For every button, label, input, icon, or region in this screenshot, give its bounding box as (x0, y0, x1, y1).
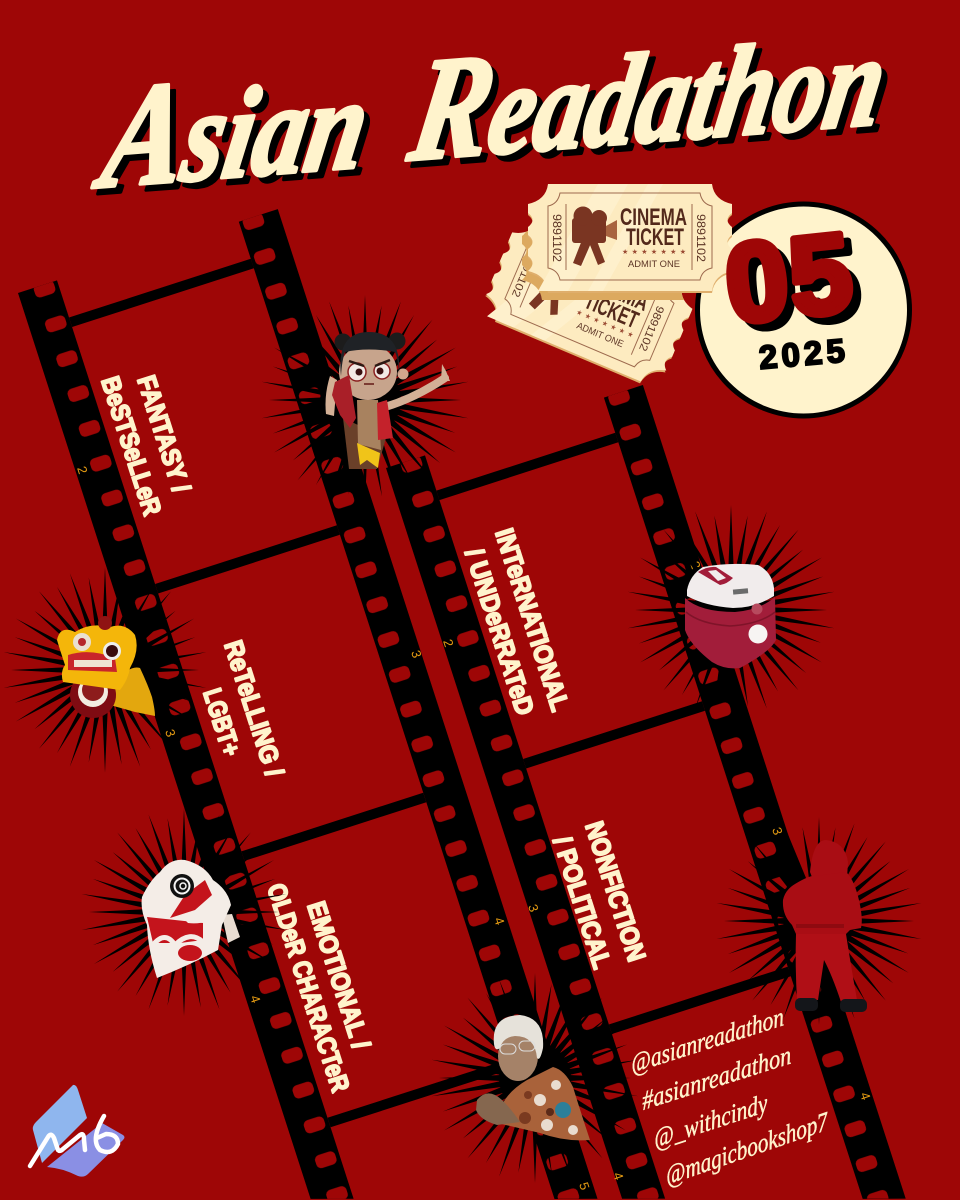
category: nonfiction / political (547, 818, 652, 972)
category: fantasy / bestseller: FANTASY / (131, 372, 197, 496)
category: retelling / lgbt+ (197, 637, 290, 780)
date: month number: 05 (719, 209, 858, 347)
illustration: white lion dance (142, 860, 240, 978)
category: fantasy / bestseller: BeSTSeLLeR (95, 373, 168, 519)
starburst: hoodie figure (716, 817, 922, 1025)
starburst: grandmother (431, 973, 639, 1183)
illustration: grandmother (476, 1015, 590, 1140)
category: fantasy / bestseller (95, 372, 197, 519)
social handles (630, 1002, 831, 1191)
title (86, 0, 905, 227)
category: retelling / lgbt+: ReTeLLING / (218, 637, 290, 780)
illustration: young warrior child (326, 332, 450, 469)
illustration: rice cooker (685, 564, 776, 668)
film frame numbers: 2 (687, 559, 704, 571)
social handles: @magicbookshop7 (664, 1106, 831, 1191)
ticket: rear (477, 214, 700, 391)
film frame numbers: 5 (576, 1180, 593, 1192)
film frame numbers: 3 (162, 727, 179, 739)
film frame numbers: 2 (74, 464, 91, 476)
category: emotional / older character: EMOTIONAL / (301, 898, 376, 1053)
social handles: #asianreadathon (641, 1040, 792, 1116)
film frame numbers: 3 (769, 825, 786, 837)
film frame numbers (74, 464, 874, 1192)
category: retelling / lgbt+: LGBT+ (197, 685, 247, 760)
film frame numbers: 4 (610, 1170, 627, 1182)
date: year: 2025 (757, 332, 846, 376)
ticket: shadow cast on rear ticket (522, 230, 684, 300)
starburst: white lion (81, 808, 287, 1016)
film frame numbers: 4 (857, 1090, 874, 1102)
social handles: @_withcindy (653, 1088, 769, 1154)
category: emotional / older character: OLDeR CHARACTeR (261, 880, 356, 1096)
category: international / underrated (459, 525, 576, 719)
film frame numbers: 4 (491, 915, 508, 927)
film frame numbers: 3 (408, 648, 425, 660)
title: Asian (92, 42, 387, 227)
film frame numbers: 2 (440, 637, 457, 649)
film frame numbers: 3 (525, 902, 542, 914)
ticket: front (528, 184, 732, 293)
date: month number: 05 (727, 216, 866, 354)
category: nonfiction / political: / POLITICAL (547, 833, 618, 972)
film frame numbers: 4 (247, 993, 264, 1005)
starburst: rice cooker (627, 505, 835, 715)
category: international / underrated: / UNDeRRATeD (459, 545, 540, 719)
title: Asian (86, 36, 381, 221)
film strip: right (386, 385, 906, 1199)
category: nonfiction / political: NONFICTION (579, 818, 652, 965)
starburst: yellow lion (3, 567, 207, 773)
social handles: @asianreadathon (630, 1002, 785, 1079)
illustration: yellow lion dance head (57, 616, 155, 718)
category: international / underrated: INTeRNATIONAL (489, 525, 576, 715)
film strip: left (18, 209, 598, 1199)
illustration: figure in red hoodie (783, 840, 867, 1012)
starburst: top (261, 295, 469, 505)
logo (30, 1085, 124, 1177)
date badge circle (698, 204, 910, 416)
